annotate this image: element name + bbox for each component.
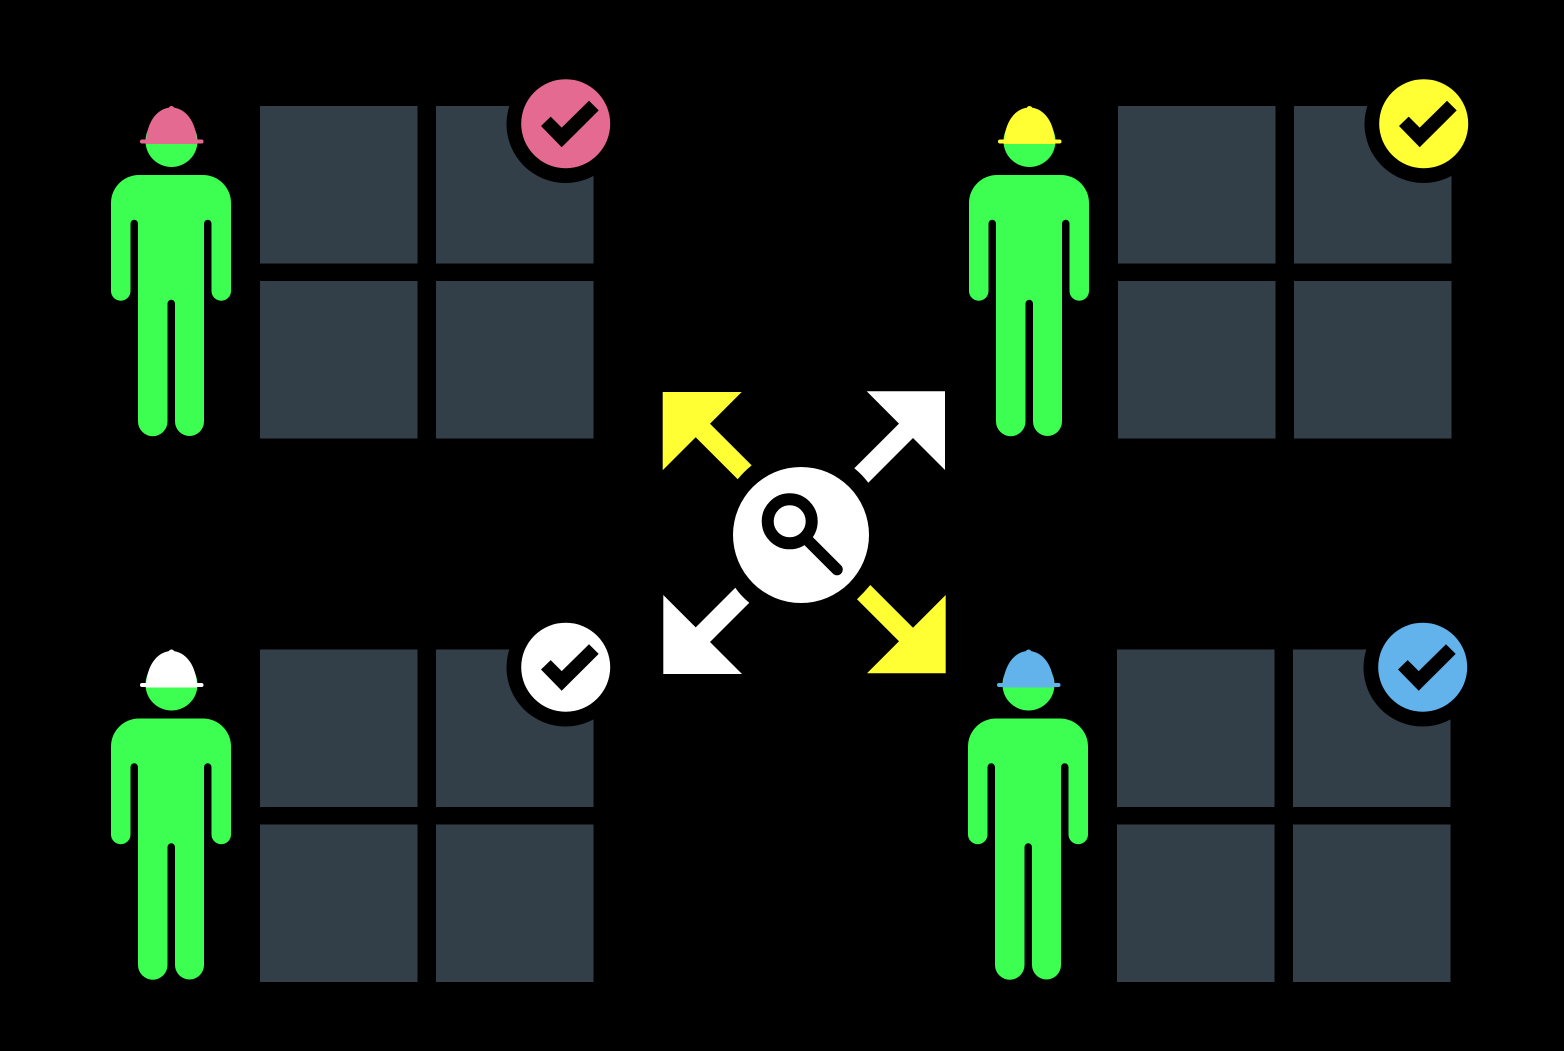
icon: worker figure green xyxy=(968,658,1088,980)
panel: worker with white hard hat xyxy=(111,608,624,982)
arrow: yellow down-right xyxy=(857,585,946,673)
arrow: white down-left xyxy=(663,588,749,674)
panel: worker with pink hard hat xyxy=(111,65,624,438)
panel: worker with blue hard hat xyxy=(968,608,1482,982)
icon: worker figure green xyxy=(111,658,231,980)
window grid xyxy=(1117,650,1450,982)
window grid xyxy=(1118,106,1452,438)
icon: pink check badge xyxy=(506,65,624,183)
icon: worker figure green xyxy=(969,115,1089,436)
icon: white check badge xyxy=(506,608,624,726)
icon: magnifying glass in white circle xyxy=(733,467,869,603)
icon: white hard hat xyxy=(140,650,204,688)
icon: yellow check badge xyxy=(1364,65,1482,183)
icon: blue check badge xyxy=(1364,608,1482,726)
panel: worker with yellow hard hat xyxy=(969,65,1482,438)
window grid xyxy=(260,106,594,438)
icon: yellow hard hat xyxy=(998,106,1062,144)
icon: blue hard hat xyxy=(997,650,1060,688)
icon: worker figure green xyxy=(111,115,231,436)
window grid xyxy=(260,650,594,982)
arrow: yellow up-left xyxy=(663,392,752,479)
icon: pink hard hat xyxy=(140,106,204,144)
arrow: white up-right xyxy=(854,391,945,483)
